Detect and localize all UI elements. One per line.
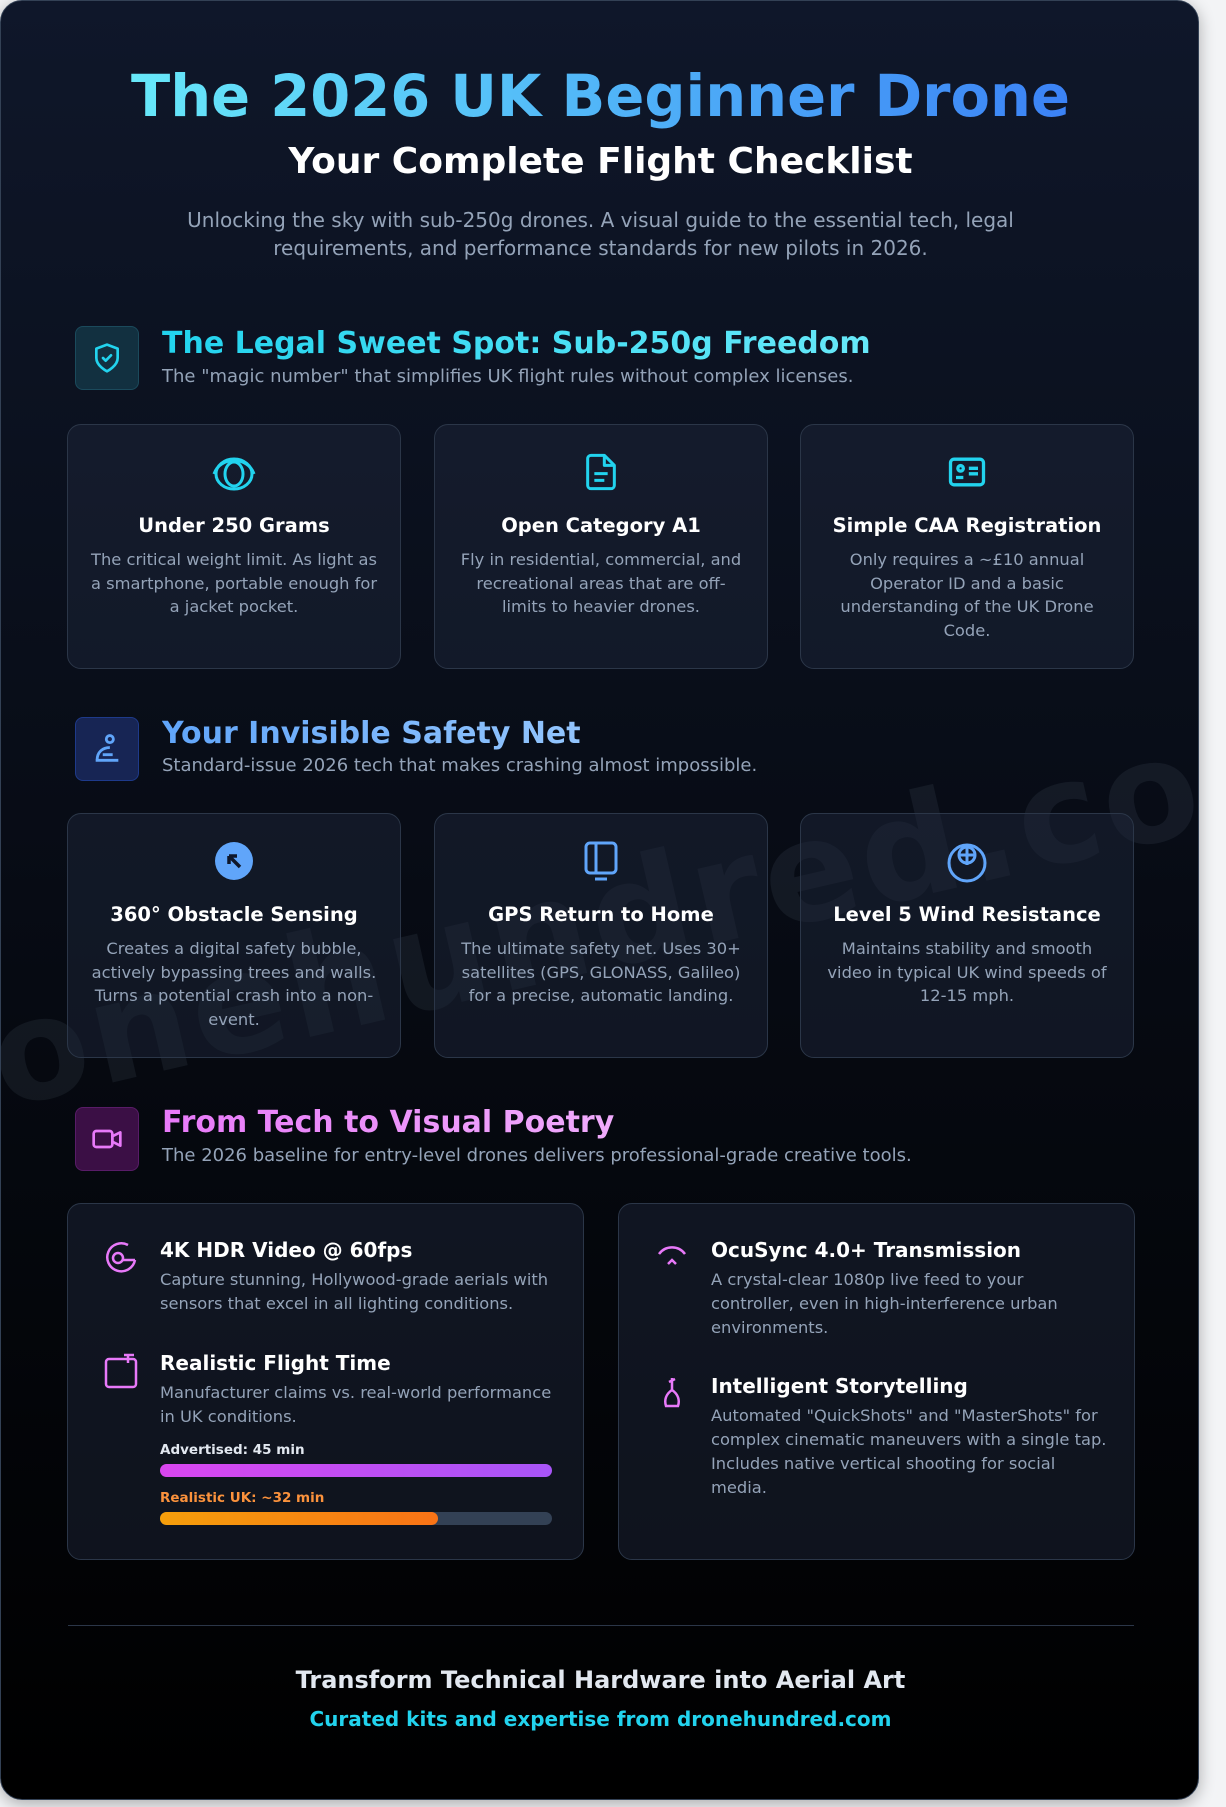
panel: obstacle sensing	[67, 813, 401, 1058]
panel: GPS: The ultimate safety net. Uses 30+ satellites (GPS, GLONASS, Galileo) for a precise, automatic landing.	[461, 939, 741, 1005]
item: 4K HDR: Capture stunning, Hollywood-grade aerials with sensors that excel in all lighting conditions.	[160, 1270, 548, 1313]
panel: open category	[434, 424, 768, 669]
icon: device	[584, 842, 618, 880]
section 3 subtext: The 2026 baseline for entry-level drones delivers professional-grade creative tools.	[162, 1145, 912, 1166]
panel: video and flight time	[67, 1203, 584, 1560]
item: storytelling: Automated "QuickShots" and "MasterShots" for complex cinematic maneuvers with a single tap. Includes native vertical shooting for social media.	[711, 1406, 1106, 1497]
title: The 2026 UK Beginner Drone	[131, 63, 1070, 130]
panel: registration: Only requires a ~£10 annual Operator ID and a basic understanding of the UK Drone Code.	[840, 550, 1094, 640]
panel: GPS	[434, 813, 768, 1058]
panel: open category: Open Category A1	[501, 514, 701, 537]
panel: open category: Fly in residential, commercial, and recreational areas that are off-limits to heavier drones.	[461, 550, 741, 616]
panel: under 250 grams: The critical weight limit. As light as a smartphone, portable enough for a jacket pocket.	[91, 550, 377, 616]
section 2 subtext: Standard-issue 2026 tech that makes crashing almost impossible.	[162, 755, 757, 776]
panel: under 250 grams: Under 250 Grams	[138, 514, 330, 537]
panel: obstacle sensing: Creates a digital safety bubble, actively bypassing trees and walls. Turns a potential crash into a non-event.	[92, 939, 376, 1029]
icon: camera lens	[106, 1242, 136, 1273]
icon: document	[586, 454, 616, 490]
panel: GPS: GPS Return to Home	[488, 903, 714, 926]
section 1 subtext: The "magic number" that simplifies UK flight rules without complex licenses.	[162, 366, 853, 387]
item: storytelling: Intelligent Storytelling	[711, 1374, 968, 1398]
item: OcuSync	[658, 1238, 1058, 1337]
intro text: Unlocking the sky with sub-250g drones. A visual guide to the essential tech, legal requirements, and performance standards for new pilots in 2026.	[187, 208, 1014, 260]
bar chart: flight time: Realistic UK: ~32 min	[160, 1490, 324, 1506]
bar chart: flight time: Advertised: 45 min	[160, 1442, 305, 1458]
item: flight time: Manufacturer claims vs. real-world performance in UK conditions.	[160, 1383, 551, 1426]
section 1 heading: The Legal Sweet Spot: Sub-250g Freedom	[162, 326, 871, 361]
bar chart: flight time	[160, 1442, 552, 1525]
item: OcuSync: A crystal-clear 1080p live feed to your controller, even in high-interference urban environments.	[711, 1270, 1058, 1337]
section 1 header icon	[75, 326, 139, 390]
panel: wind: Maintains stability and smooth video in typical UK wind speeds of 12-15 mph.	[827, 939, 1107, 1005]
item: 4K HDR	[106, 1238, 548, 1313]
section 2 heading: Your Invisible Safety Net	[162, 716, 581, 751]
panel: wind: Level 5 Wind Resistance	[833, 903, 1101, 926]
icon: signal	[658, 1246, 686, 1265]
panel: registration	[800, 424, 1134, 669]
item: OcuSync: OcuSync 4.0+ Transmission	[711, 1238, 1021, 1262]
icon: wand	[664, 1378, 680, 1408]
item: flight time: Realistic Flight Time	[160, 1351, 391, 1375]
panel: obstacle sensing: 360° Obstacle Sensing	[110, 903, 358, 926]
icon: radar	[215, 842, 253, 880]
icon: battery	[104, 1354, 138, 1388]
icon: id card	[948, 458, 986, 486]
item: flight time	[104, 1351, 551, 1426]
footer link: Curated kits and expertise from dronehundred.com	[310, 1707, 891, 1731]
footer heading: Transform Technical Hardware into Aerial Art	[296, 1666, 905, 1694]
panel: registration: Simple CAA Registration	[833, 514, 1101, 537]
subtitle: Your Complete Flight Checklist	[288, 141, 913, 182]
item: storytelling	[664, 1374, 1106, 1497]
item: 4K HDR: 4K HDR Video @ 60fps	[160, 1238, 412, 1262]
section 2 header icon	[75, 717, 139, 781]
icon: eye	[212, 458, 256, 490]
section 3 header icon	[75, 1107, 139, 1171]
panel: wind	[800, 813, 1134, 1058]
panel: under 250 grams	[67, 424, 401, 669]
panel: transmission and storytelling	[618, 1203, 1135, 1560]
icon: target	[948, 844, 986, 882]
section 3 heading: From Tech to Visual Poetry	[162, 1105, 614, 1140]
